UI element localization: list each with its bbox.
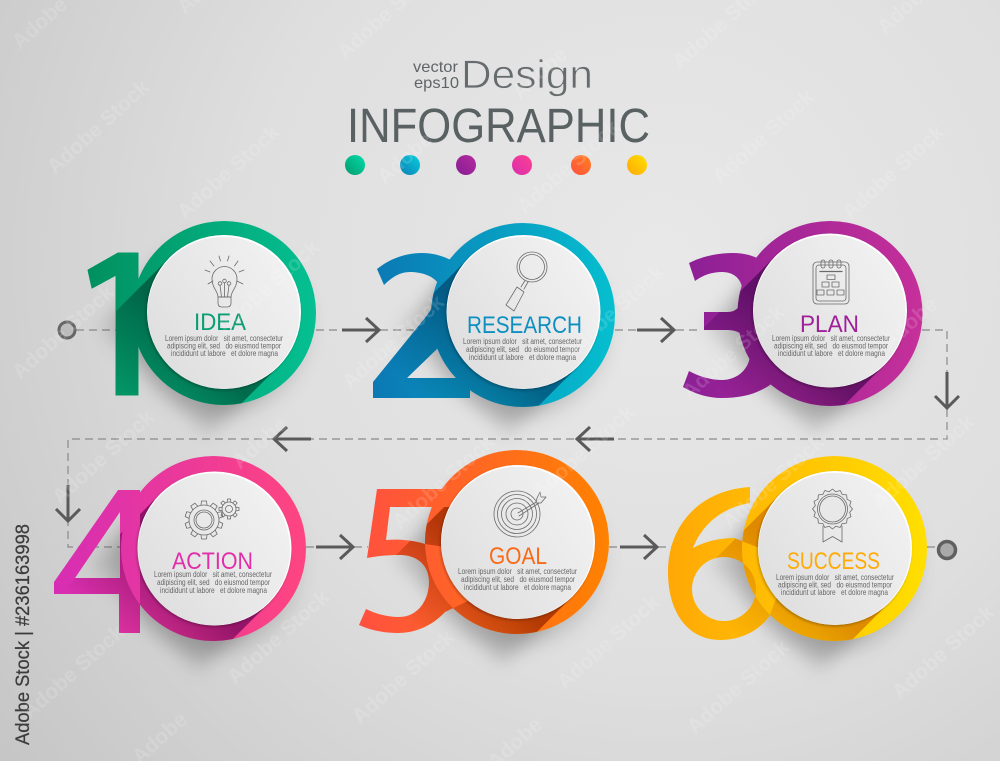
stock watermark pattern: Adobe (228, 413, 292, 474)
label: RESEARCH (467, 312, 582, 339)
arrow 3 down (935, 372, 959, 408)
numeral 5 (359, 489, 470, 633)
body text: adipiscing elit, sed do eiusmod tempor (774, 342, 888, 350)
arrow left upper (577, 427, 614, 451)
arrow 4 down (56, 485, 80, 521)
body text (458, 567, 577, 592)
body text (772, 334, 890, 358)
connector flow line (56, 318, 959, 559)
colour dots (345, 155, 647, 175)
stock watermark pattern: Adobe Stock (718, 431, 829, 534)
ring (132, 221, 316, 405)
stock watermark pattern: Adobe Stock (338, 291, 449, 394)
body text: incididunt ut labore et dolore magna (160, 586, 267, 595)
icon: planner notebook (813, 260, 849, 304)
ring (431, 223, 615, 407)
body text: adipiscing elit, sed do eiusmod tempor (778, 580, 892, 590)
stock watermark pattern: Adobe Stock (388, 431, 499, 534)
ring (742, 456, 927, 641)
numeral 1 (88, 253, 138, 395)
body text: Lorem ipsum dolor sit amet, consectetur (463, 337, 582, 346)
title (347, 53, 650, 153)
stock watermark pattern: Adobe Stock (48, 406, 159, 509)
stock watermark pattern: Adobe Stock (553, 591, 664, 694)
stock watermark pattern: Adobe (508, 43, 572, 104)
disc (136, 472, 292, 627)
stock watermark pattern: Adobe Stock (43, 76, 154, 179)
arrow 5 to 6 (620, 535, 657, 559)
stock watermark pattern: Adobe Stock (868, 411, 979, 514)
label: ACTION (172, 548, 253, 575)
body text (165, 334, 283, 358)
stock watermark pattern: Adobe Stock (18, 621, 129, 724)
body text: incididunt ut labore et dolore magna (469, 353, 576, 362)
disc (757, 471, 912, 626)
body text (463, 337, 582, 362)
ring (121, 456, 306, 641)
ring (738, 221, 922, 406)
INFOGRAPHIC heading: INFOGRAPHIC (347, 100, 650, 153)
stock watermark pattern: Adobe (878, 293, 942, 354)
body text: Lorem ipsum dolor sit amet, consectetur (776, 573, 894, 582)
body text: Lorem ipsum dolor sit amet, consectetur (772, 334, 890, 343)
disc (446, 235, 600, 390)
arrow 2 to 3 (637, 318, 674, 342)
body text: incididunt ut labore et dolore magna (171, 349, 278, 358)
body text: adipiscing elit, sed do eiusmod tempor (466, 345, 580, 354)
stock watermark pattern: Adobe Stock (888, 601, 999, 704)
step 3: plan (683, 221, 922, 434)
stock watermark pattern: Adobe Stock (513, 116, 624, 219)
disc (440, 465, 595, 620)
icon: gears (185, 499, 239, 539)
label: PLAN (800, 311, 859, 338)
icon: magnifying glass (506, 252, 547, 311)
stock watermark pattern: Adobe Stock (223, 586, 334, 689)
body text: Lorem ipsum dolor sit amet, consectetur (154, 570, 272, 579)
numeral 6 (668, 487, 790, 640)
stock watermark pattern: Adobe Stock (348, 626, 459, 729)
vector eps10 tag: vector (413, 59, 459, 76)
vector eps10 tag (413, 59, 459, 92)
label: SUCCESS (787, 548, 880, 575)
stock watermark pattern: Adobe (373, 128, 437, 189)
body text: adipiscing elit, sed do eiusmod tempor (461, 575, 575, 584)
body text: incididunt ut labore et dolore magna (778, 349, 885, 358)
icon: target with arrow (494, 491, 546, 537)
label: IDEA (194, 309, 247, 336)
stock watermark pattern: Adobe Stock (558, 261, 669, 364)
body text: incididunt ut labore et dolore magna (781, 588, 888, 597)
stock watermark pattern: Adobe Stock (708, 86, 819, 189)
arrow 1 to 2 (342, 318, 379, 342)
start node (59, 322, 75, 338)
arrow 4 to 5 (316, 535, 353, 559)
stock watermark pattern: Adobe Stock (683, 636, 794, 739)
Design heading: Design (461, 53, 593, 97)
icon: award badge (812, 489, 852, 542)
stock watermark pattern: Adobe Stock (528, 401, 639, 504)
stock watermark pattern: Adobe Stock (173, 121, 284, 224)
numeral 3 (683, 253, 800, 398)
numeral 2 (373, 253, 480, 398)
numeral 4 (54, 490, 140, 633)
stock id label: Adobe Stock | #236163998 (13, 524, 34, 745)
body text (776, 573, 894, 597)
end node (938, 542, 956, 558)
step 2: research (373, 223, 615, 436)
ring (425, 450, 609, 634)
step 4: action (54, 456, 306, 672)
body text: adipiscing elit, sed do eiusmod tempor (167, 342, 281, 350)
stock watermark pattern: Adobe Stock (8, 281, 119, 384)
body text: adipiscing elit, sed do eiusmod tempor (157, 578, 270, 587)
step 6: success (668, 456, 927, 672)
disc (752, 234, 907, 389)
vector eps10 tag: eps10 (414, 75, 459, 92)
step 1: idea (88, 221, 316, 436)
icon: light bulb (205, 256, 244, 307)
arrow left lower (274, 427, 311, 451)
stock watermark pattern: Adobe Stock (213, 236, 324, 339)
stock watermark pattern: Adobe Stock (838, 121, 949, 224)
stock watermark pattern: Adobe Stock (678, 301, 789, 404)
body text (154, 570, 272, 595)
disc (146, 235, 301, 390)
body text: incididunt ut labore et dolore magna (464, 583, 571, 592)
body text: Lorem ipsum dolor sit amet, consectetur (458, 567, 577, 576)
step 5: goal (359, 450, 609, 666)
label: GOAL (489, 543, 547, 570)
body text: Lorem ipsum dolor sit amet, consectetur (165, 334, 283, 343)
